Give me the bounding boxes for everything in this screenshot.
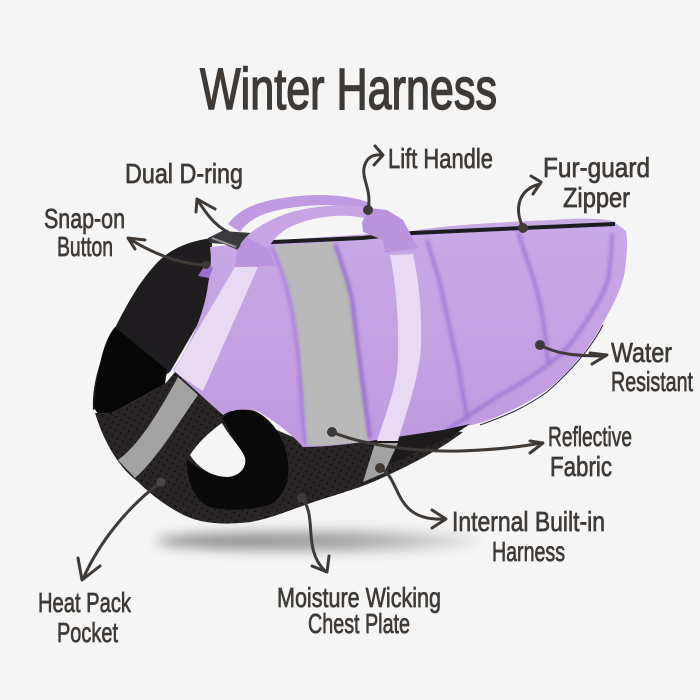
- label: Internal Built-in Harness: Harness: [492, 536, 565, 567]
- black fleece around arm opening: [187, 409, 288, 510]
- near handle left base: [235, 237, 275, 267]
- mesh dot texture: [95, 372, 463, 524]
- left reflective stripe on mesh: [118, 377, 198, 478]
- panel shading edges: [271, 244, 370, 443]
- label: Snap-on Button: [44, 203, 210, 269]
- label: Dual D-ring: Dual D-ring: [125, 158, 243, 189]
- grey reflective panel: [273, 242, 368, 445]
- near handle: [240, 206, 372, 252]
- right stripe on mesh: [363, 443, 398, 482]
- label: Snap-on Button: Snap-on: [44, 203, 125, 234]
- label: Reflective Fabric: Fabric: [550, 451, 612, 482]
- right reflective stripe: [377, 254, 421, 441]
- label: Lift Handle: [363, 143, 493, 215]
- label: Water Resistant: [535, 337, 693, 397]
- label: Lift Handle: Lift Handle: [388, 143, 493, 174]
- purple strip behind neck: [132, 260, 166, 300]
- label: Reflective Fabric: Reflective: [548, 421, 632, 452]
- title: Winter Harness: [200, 57, 497, 122]
- mesh chest plate: [95, 372, 463, 524]
- black neck and back lining: [93, 238, 212, 410]
- right handle base: [362, 208, 418, 253]
- purple quilted body: [173, 219, 627, 447]
- ground shadow: [156, 531, 480, 551]
- label: Moisture Wicking Chest Plate: Moisture Wicking: [277, 582, 441, 613]
- inner neck opening: [94, 327, 167, 414]
- label: Snap-on Button: Button: [57, 231, 113, 262]
- label: Internal Built-in Harness: Internal Built-in: [452, 506, 605, 537]
- label: Heat Pack Pocket: Pocket: [57, 617, 118, 648]
- arm opening: [190, 423, 245, 477]
- label: Water Resistant: Water: [611, 337, 672, 368]
- seam shading: [427, 232, 612, 430]
- black strip under body: [370, 424, 470, 470]
- back edge dark trim: [480, 325, 603, 425]
- far handle: [228, 195, 374, 232]
- label: Heat Pack Pocket: [38, 478, 166, 648]
- label: Moisture Wicking Chest Plate: Chest Plate: [308, 608, 410, 639]
- label: Fur-guard Zipper: Zipper: [563, 182, 630, 213]
- label: Fur-guard Zipper: Fur-guard: [543, 152, 650, 183]
- label: Internal Built-in Harness: [375, 463, 605, 567]
- metal D-ring buckle: [208, 231, 252, 250]
- snap-on button tab: [198, 262, 213, 278]
- left reflective stripe on purple: [174, 267, 258, 391]
- label: Dual D-ring: [125, 158, 243, 232]
- label: Moisture Wicking Chest Plate: [277, 493, 441, 639]
- illustration: purple winter harness: [93, 195, 627, 524]
- label: Fur-guard Zipper: [518, 152, 650, 233]
- label: Heat Pack Pocket: Heat Pack: [38, 587, 132, 618]
- zipper: [250, 224, 615, 243]
- label: Reflective Fabric: [327, 421, 632, 482]
